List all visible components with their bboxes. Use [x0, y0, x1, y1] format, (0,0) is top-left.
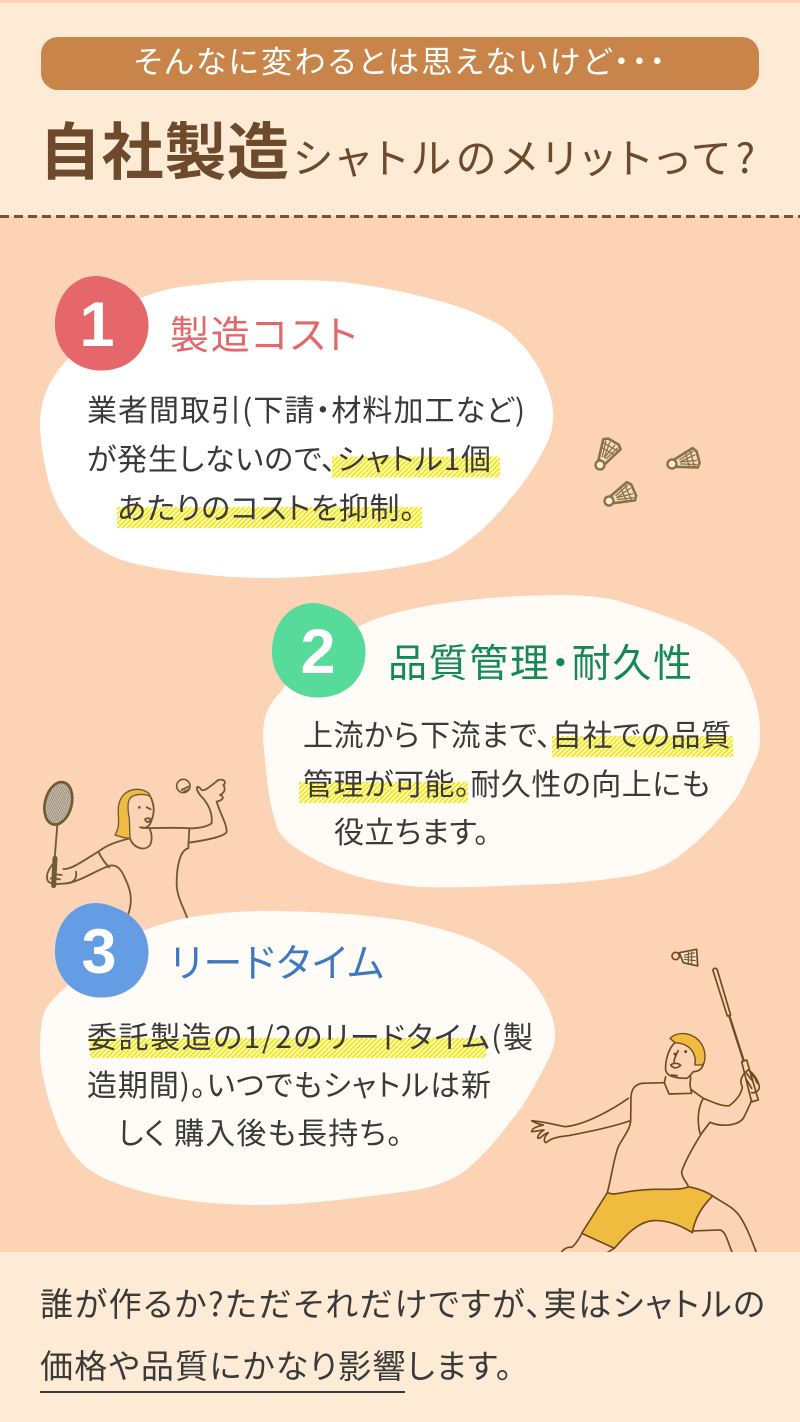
number badge 3 [55, 903, 149, 998]
footer underline [40, 1391, 405, 1393]
body text 3: しく 購入後も長持ち。 [118, 1109, 402, 1153]
title: シャトルのメリットって? [293, 125, 755, 185]
panel: 品質管理・耐久性 [263, 595, 760, 887]
panel: 製造コスト [40, 276, 553, 578]
shuttlecock B [665, 447, 701, 475]
footer text: 価格や品質にかなり影響します。 [40, 1340, 512, 1388]
highlight 3 [90, 1038, 486, 1058]
number badge 2 [272, 603, 366, 698]
footer text: 誰が作るか?ただそれだけですが、実はシャトルの [40, 1278, 765, 1326]
footer text [40, 1278, 765, 1388]
number badge 1: 1 [79, 290, 115, 360]
lead-in pill: そんなに変わるとは思えないけど・・・ [134, 37, 665, 82]
body text 2: 上流から下流まで、自社での品質 [303, 711, 731, 755]
body text 1: が発生しないので、シャトル1個 [87, 435, 491, 479]
highlights 1 [117, 456, 500, 528]
illustration: man with racket [532, 949, 759, 1255]
heading 3: リードタイム [170, 933, 384, 989]
lead-in pill [41, 37, 759, 90]
body text 3: 造期間)。いつでもシャトルは新 [87, 1061, 491, 1105]
footer band [0, 1252, 800, 1422]
number badge 3: 3 [81, 917, 117, 987]
heading 2: 品質管理・耐久性 [388, 633, 692, 689]
number badge 1 [55, 276, 149, 371]
shuttlecock C [601, 481, 638, 512]
body text 2: 役立ちます。 [334, 808, 489, 852]
body text 1 [87, 386, 525, 528]
panel: リードタイム [40, 903, 555, 1205]
highlights 2 [299, 736, 733, 803]
body text 3: 委託製造の1/2のリードタイム(製 [87, 1013, 533, 1057]
title [39, 102, 755, 192]
number badge 2: 2 [300, 617, 336, 687]
shuttlecock icons [589, 437, 701, 512]
body text 1: あたりのコストを抑制。 [117, 484, 415, 528]
body text 2 [303, 711, 731, 852]
body text 3 [87, 1013, 533, 1153]
shuttlecock A [589, 437, 622, 474]
header band [0, 3, 800, 216]
heading 1: 製造コスト [170, 305, 357, 361]
illustration: woman with racket [40, 779, 227, 918]
body text 1: 業者間取引(下請・材料加工など) [87, 386, 525, 430]
body text 2: 管理が可能。耐久性の向上にも [303, 760, 710, 804]
title: 自社製造 [39, 102, 289, 192]
